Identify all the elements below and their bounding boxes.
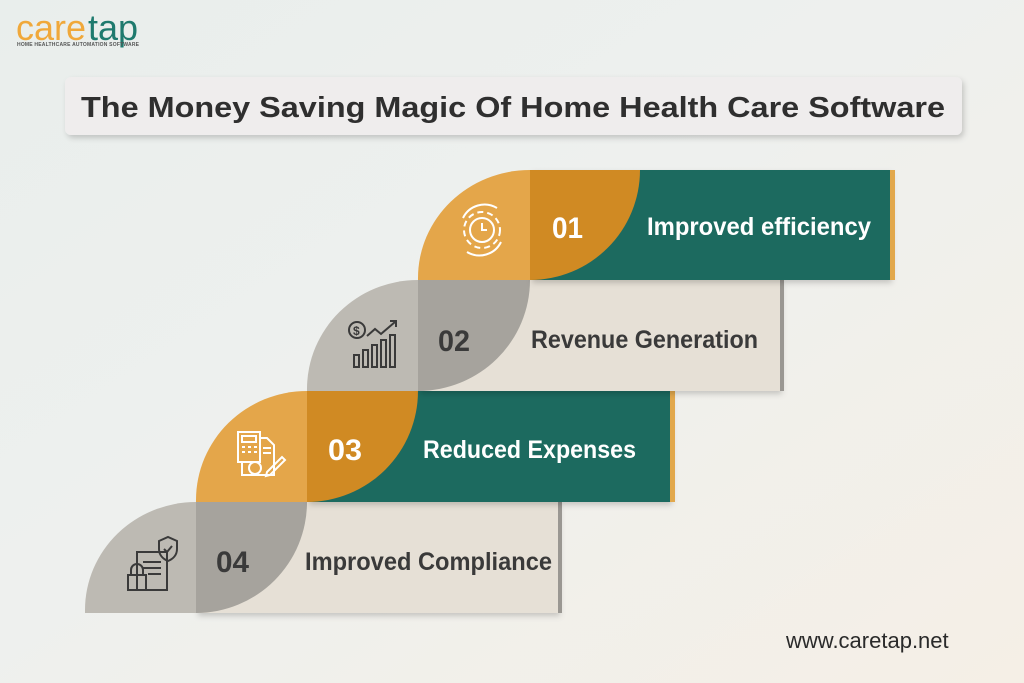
icon: calculator bill bbox=[238, 432, 285, 476]
step 02 bbox=[307, 280, 784, 391]
logo bbox=[16, 7, 140, 48]
website url: www.caretap.net bbox=[785, 628, 949, 653]
title: The Money Saving Magic Of Home Health Care Software bbox=[81, 92, 945, 124]
icon: gear clock bbox=[463, 205, 501, 255]
step 02: 02 bbox=[438, 325, 470, 358]
step 03 bbox=[196, 391, 675, 502]
step 01 bbox=[418, 170, 895, 280]
step 01: 01 bbox=[552, 212, 583, 245]
step 01: Improved efficiency bbox=[647, 213, 871, 241]
step 04: 04 bbox=[216, 546, 249, 579]
logo: care bbox=[16, 7, 86, 48]
icon: revenue chart bbox=[349, 321, 396, 367]
logo: HOME HEALTHCARE AUTOMATION SOFTWARE bbox=[17, 42, 140, 48]
step 04 bbox=[85, 502, 562, 613]
step 04: Improved Compliance bbox=[305, 548, 552, 576]
icon: revenue chart: $ bbox=[353, 324, 360, 338]
title bbox=[65, 77, 962, 135]
logo: tap bbox=[88, 7, 138, 48]
step 03: 03 bbox=[328, 434, 362, 467]
icon: lock document bbox=[128, 537, 177, 590]
step 03: Reduced Expenses bbox=[423, 436, 636, 464]
step 02: Revenue Generation bbox=[531, 326, 758, 354]
